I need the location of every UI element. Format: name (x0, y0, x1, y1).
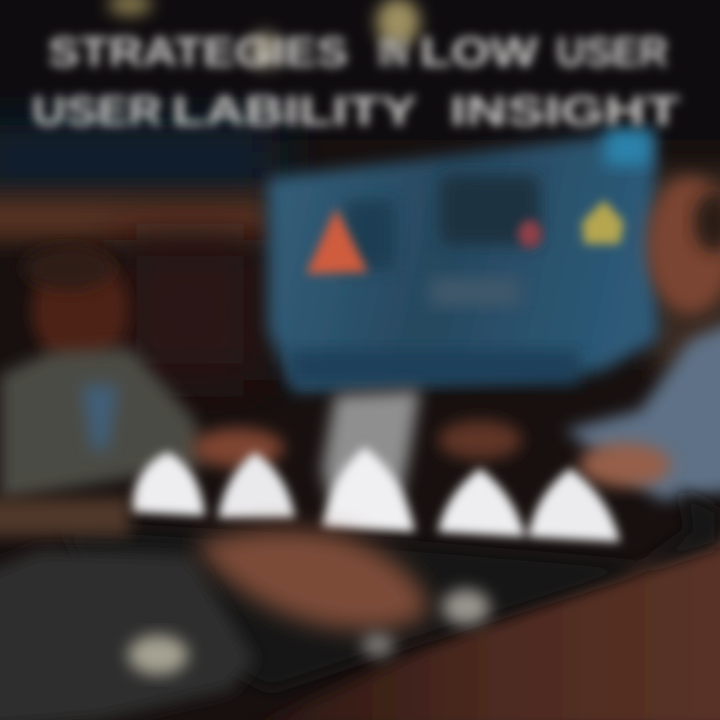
presentation screen (268, 130, 658, 392)
keyboard (0, 550, 255, 720)
person: left (0, 246, 205, 500)
title: STRATEGIES (48, 28, 348, 75)
row of white figures (130, 447, 620, 542)
icon: red triangle (306, 208, 368, 274)
title: INSIGHT (450, 87, 680, 134)
white paper stand (322, 390, 420, 500)
small white glows (362, 589, 490, 657)
title: IN (378, 28, 408, 75)
title: LOW (420, 28, 538, 75)
hands (192, 420, 522, 468)
foreground hand (195, 529, 430, 630)
icon: ceiling lights (108, 0, 420, 68)
person: right (565, 177, 720, 500)
title: LABILITY (172, 87, 417, 134)
title: USER (556, 28, 668, 75)
title (32, 28, 680, 134)
icon: yellow badge (582, 200, 624, 244)
table edge shadow (60, 490, 720, 690)
icon: small red marker (518, 220, 542, 248)
title: USER (32, 87, 162, 134)
table strip (0, 498, 130, 536)
